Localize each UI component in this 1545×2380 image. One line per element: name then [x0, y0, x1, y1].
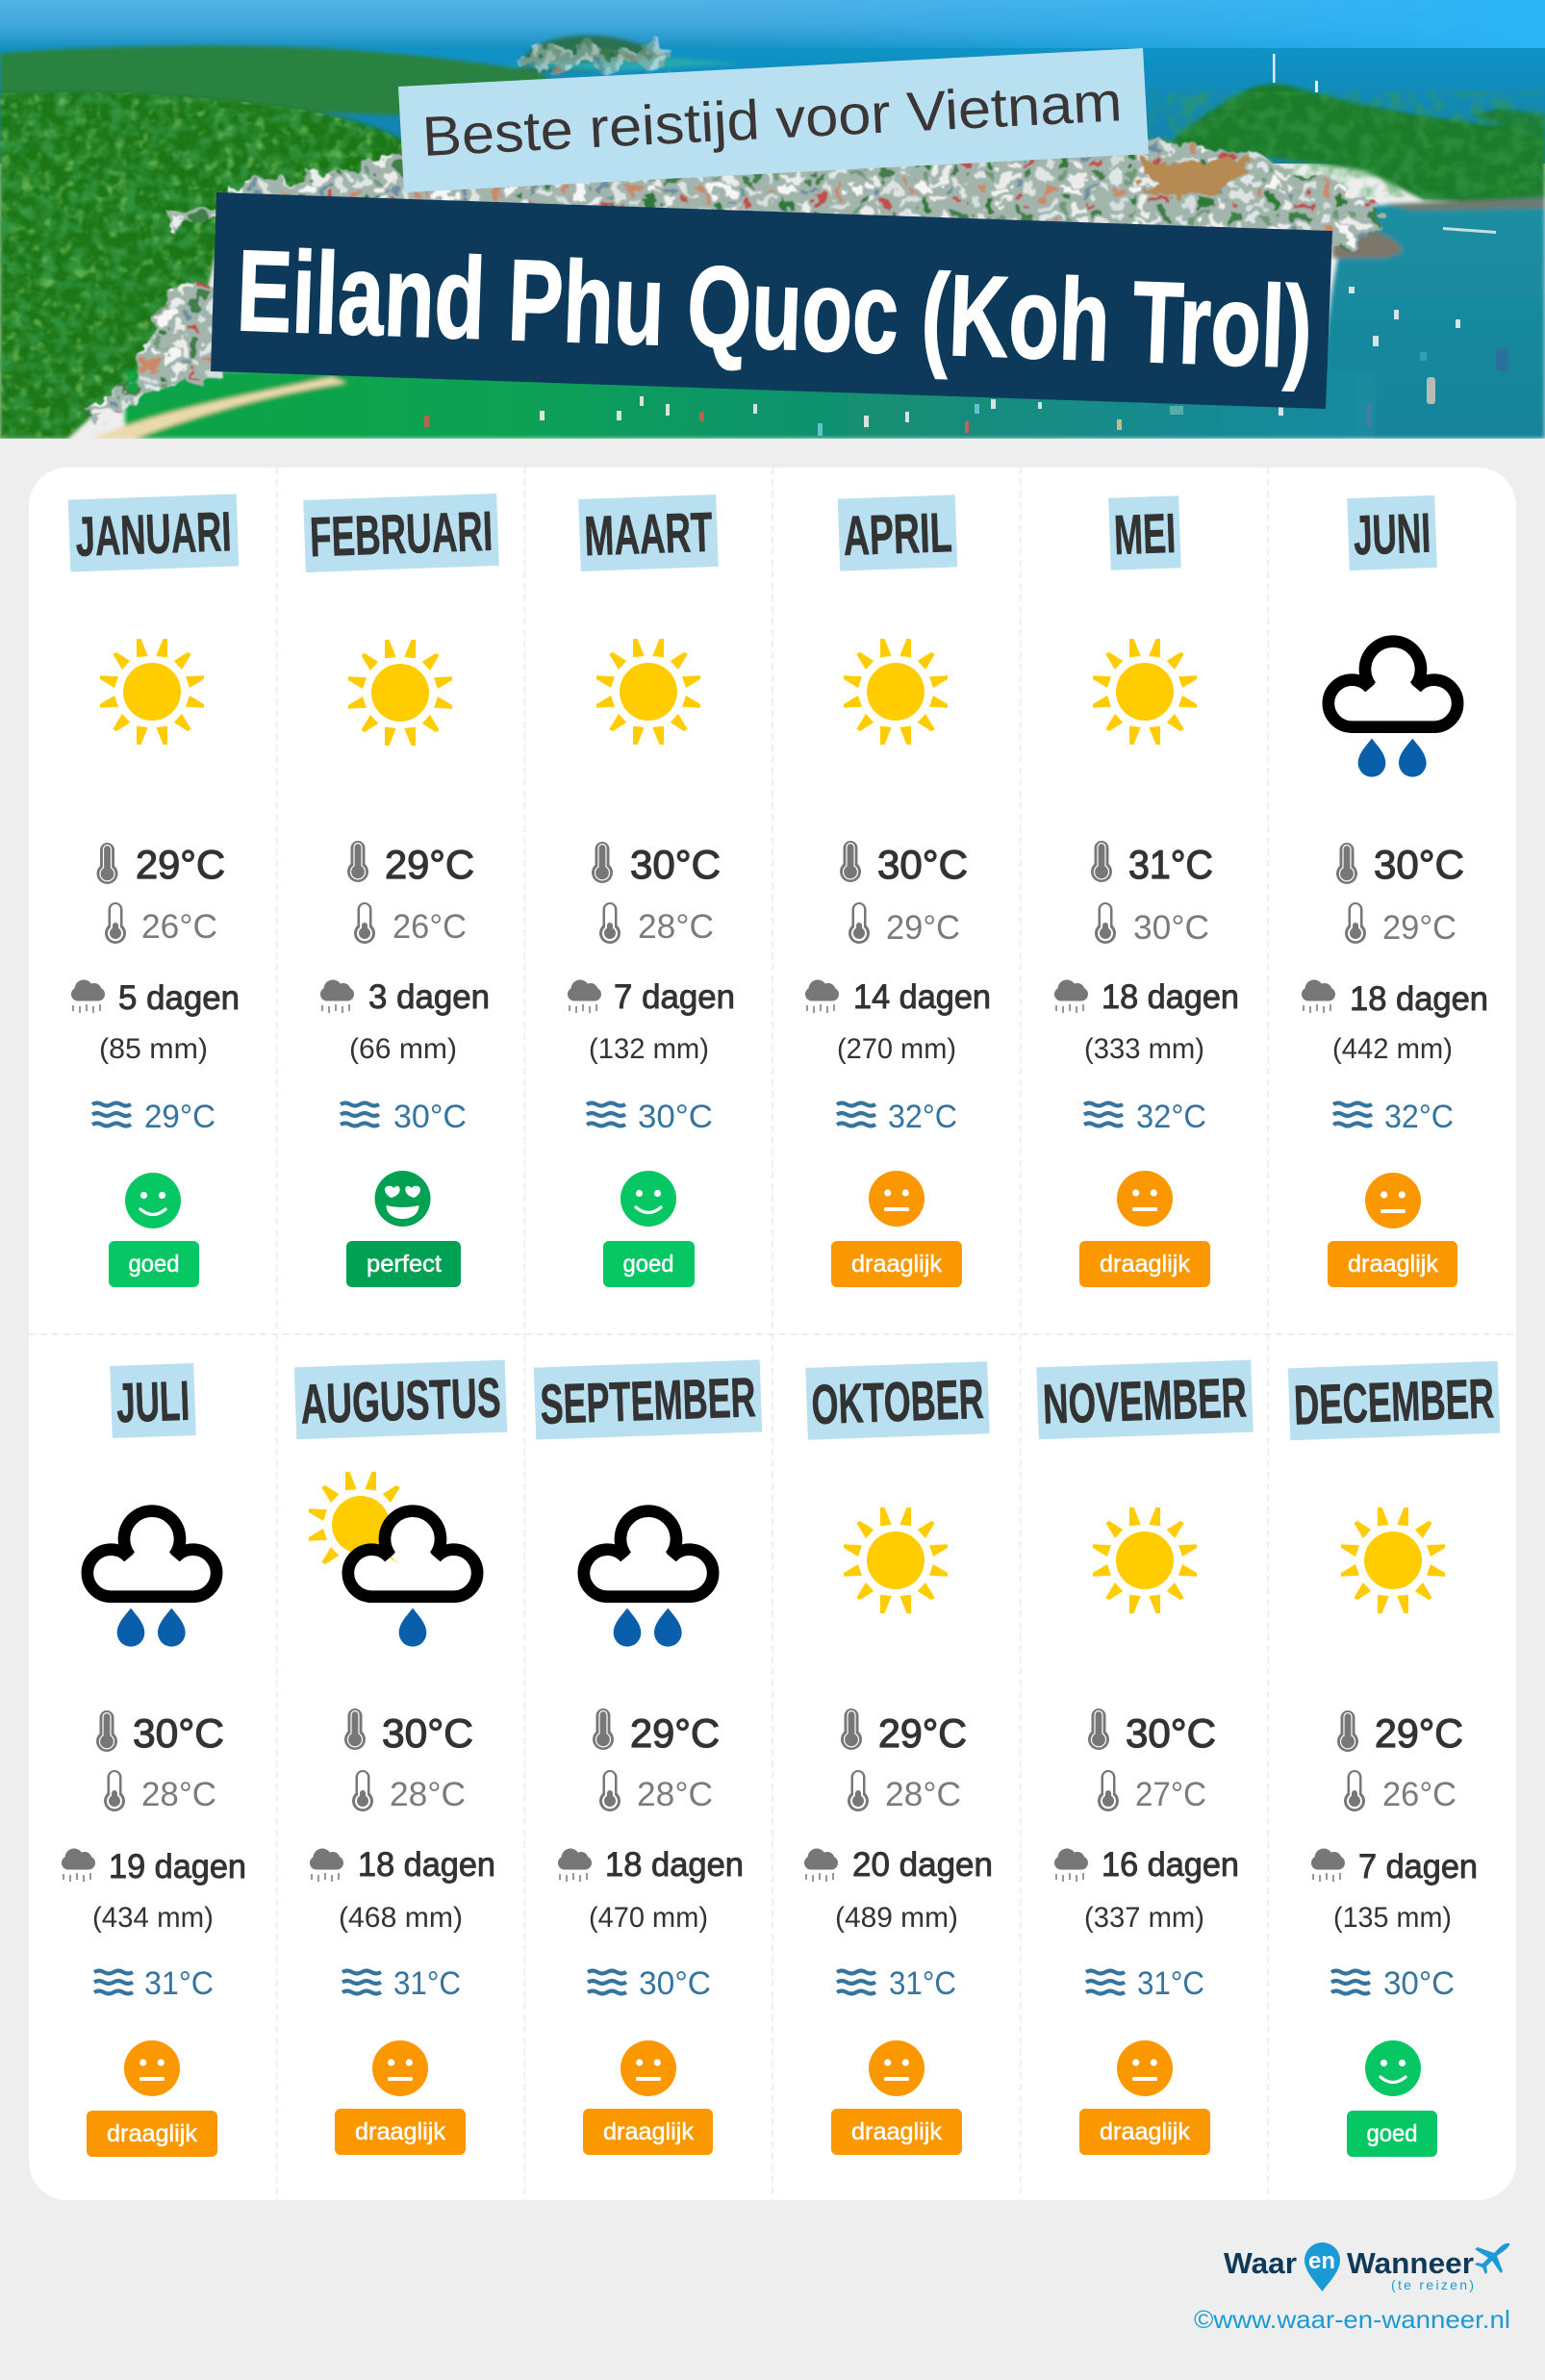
min temperature: 26°C [393, 908, 467, 946]
sea temperature: 31°C [144, 1965, 214, 2002]
logo: Waar en Wanneer [1224, 2242, 1509, 2292]
rain days: 7 dagen [1358, 1848, 1478, 1886]
min temperature [1098, 1770, 1206, 1813]
badge draaglijk [1079, 1241, 1210, 1287]
badge draaglijk: draaglijk [355, 2118, 445, 2145]
rainfall: (442 mm) [1332, 1033, 1453, 1065]
logo: Waar en Wanneer: en [1308, 2248, 1335, 2274]
title banner [211, 192, 1332, 409]
month label juli [110, 1363, 196, 1438]
badge goed: goed [623, 1251, 673, 1278]
badge goed [109, 1241, 199, 1287]
logo: Waar en Wanneer: Waar [1224, 2246, 1297, 2280]
rainfall: (468 mm) [339, 1902, 463, 1934]
month label november: NOVEMBER [1042, 1366, 1248, 1436]
panel: april [805, 494, 991, 1287]
smiley neutral [869, 2040, 924, 2096]
panel: juni [1302, 495, 1488, 1287]
badge draaglijk [583, 2109, 713, 2155]
badge perfect [346, 1241, 461, 1287]
panel: maart [568, 494, 735, 1287]
max temperature [347, 841, 474, 887]
badge goed: goed [129, 1251, 179, 1278]
grid dividers [29, 468, 1516, 2200]
max temperature [96, 842, 225, 887]
min temperature [599, 902, 714, 946]
rain days: 3 dagen [368, 978, 490, 1016]
month label april: APRIL [842, 501, 953, 568]
panel: oktober [804, 1361, 993, 2155]
icon: sun [844, 639, 948, 745]
rainfall: (132 mm) [589, 1033, 709, 1065]
min temperature: 30°C [1133, 909, 1209, 947]
max temperature: 29°C [136, 842, 225, 887]
sea temperature: 30°C [638, 1099, 713, 1135]
sea temperature: 29°C [144, 1099, 215, 1135]
min temperature: 26°C [1382, 1776, 1456, 1813]
icon: airplane [1475, 2243, 1509, 2274]
icon: sun [100, 639, 204, 745]
max temperature [841, 1709, 967, 1756]
rain days: 18 dagen [605, 1846, 744, 1884]
max temperature [1091, 841, 1213, 887]
badge draaglijk [831, 2109, 962, 2155]
min temperature [1345, 902, 1456, 947]
badge draaglijk: draaglijk [1348, 1251, 1438, 1278]
sea temperature: 30°C [639, 1965, 711, 2002]
sea temperature [94, 1965, 214, 2002]
panel: januari [68, 494, 240, 1287]
month label september: SEPTEMBER [539, 1366, 757, 1436]
rainfall: (489 mm) [835, 1902, 958, 1934]
max temperature: 30°C [630, 842, 721, 887]
rainfall: (66 mm) [349, 1033, 457, 1065]
smiley neutral [869, 1171, 924, 1227]
smiley neutral [372, 2040, 428, 2096]
badge draaglijk [335, 2109, 466, 2155]
panel: december [1288, 1361, 1500, 2157]
min temperature [104, 1770, 216, 1813]
forest texture [0, 92, 402, 439]
month label mei: MEI [1113, 502, 1177, 567]
smiley neutral [1365, 1173, 1421, 1228]
badge draaglijk: draaglijk [1100, 2118, 1190, 2145]
month label januari [68, 494, 239, 572]
min temperature [1095, 902, 1209, 947]
month label september [534, 1359, 762, 1440]
min temperature: 28°C [637, 1776, 713, 1813]
month label november [1036, 1360, 1254, 1439]
icon: sun [348, 640, 452, 746]
sea temperature [341, 1099, 467, 1135]
icon: sun [1093, 639, 1197, 745]
icon: cloud with two drops [1329, 642, 1457, 777]
logo: Waar en Wanneer: (te reizen) [1391, 2277, 1474, 2292]
max temperature: 31°C [1128, 842, 1213, 887]
panel: mei [1054, 495, 1239, 1287]
month label oktober [805, 1361, 990, 1440]
rain days: 18 dagen [1350, 980, 1488, 1018]
icon: sun [1093, 1507, 1197, 1613]
month label augustus: AUGUSTUS [299, 1366, 502, 1436]
rain days: 20 dagen [852, 1846, 993, 1884]
badge perfect: perfect [367, 1251, 442, 1278]
min temperature [848, 902, 960, 947]
min temperature [848, 1770, 961, 1813]
badge draaglijk: draaglijk [851, 2118, 942, 2145]
rain days: 16 dagen [1102, 1846, 1239, 1884]
max temperature [593, 1709, 720, 1756]
month label augustus [294, 1360, 507, 1439]
sea temperature [92, 1099, 215, 1135]
max temperature: 29°C [878, 1710, 967, 1756]
rain days: 19 dagen [109, 1848, 246, 1886]
sea temperature [837, 1965, 956, 2002]
max temperature: 30°C [133, 1710, 224, 1756]
max temperature: 30°C [877, 842, 968, 887]
month label oktober: OKTOBER [810, 1368, 985, 1436]
rain days: 18 dagen [358, 1846, 495, 1884]
max temperature [344, 1709, 473, 1756]
panel: white calendar card [29, 468, 1516, 2200]
rain days: 14 dagen [853, 978, 991, 1016]
subtitle text: Beste reistijd voor Vietnam [420, 70, 1124, 168]
badge draaglijk [1079, 2109, 1210, 2155]
max temperature [1337, 1710, 1463, 1756]
subtitle banner [398, 48, 1149, 192]
panel: juli [62, 1363, 246, 2157]
smiley neutral [621, 2040, 676, 2096]
sea temperature: 32°C [1384, 1099, 1454, 1135]
rain days: 7 dagen [614, 978, 735, 1016]
smiley neutral [124, 2040, 180, 2096]
month label april [838, 494, 957, 571]
icon: sun [1341, 1507, 1445, 1613]
month label juni [1347, 495, 1437, 570]
sea temperature: 31°C [1137, 1965, 1204, 2002]
max temperature: 29°C [630, 1710, 720, 1756]
sea temperature: 32°C [1136, 1099, 1206, 1135]
sea temperature: 30°C [393, 1099, 467, 1135]
sea temperature: 31°C [393, 1965, 461, 2002]
rain days: 5 dagen [118, 979, 240, 1017]
max temperature: 30°C [1126, 1710, 1216, 1756]
radio tower and boats [424, 54, 1508, 436]
badge draaglijk: draaglijk [851, 1251, 942, 1278]
sea temperature [1331, 1965, 1455, 2002]
min temperature: 29°C [1382, 909, 1456, 947]
max temperature: 30°C [382, 1710, 473, 1756]
badge draaglijk [1328, 1241, 1457, 1287]
smiley good [621, 1171, 676, 1227]
rainfall: (434 mm) [92, 1902, 214, 1934]
sea temperature [1084, 1099, 1206, 1135]
rain days: 18 dagen [1102, 978, 1239, 1016]
sea temperature [587, 1099, 713, 1135]
icon: cloud with two drops [584, 1511, 713, 1647]
month label februari [303, 494, 499, 572]
month label maart [578, 494, 719, 571]
badge draaglijk: draaglijk [603, 2118, 694, 2145]
panel: november [1036, 1360, 1254, 2155]
badge draaglijk: draaglijk [107, 2120, 197, 2147]
month label mei [1108, 495, 1181, 570]
rainfall: (270 mm) [837, 1033, 956, 1065]
icon: sun [596, 639, 700, 745]
sea temperature [342, 1965, 461, 2002]
month label juni: JUNI [1353, 502, 1431, 567]
badge goed [1347, 2111, 1437, 2157]
smiley perfect [375, 1171, 431, 1227]
month label juli: JULI [115, 1370, 190, 1434]
max temperature [1088, 1709, 1216, 1756]
smiley neutral [1117, 1171, 1173, 1227]
icon: sun behind cloud with drop [309, 1472, 477, 1647]
sea temperature [1333, 1099, 1454, 1135]
rainfall: (333 mm) [1084, 1033, 1204, 1065]
icon: cloud with two drops [88, 1511, 216, 1647]
sea temperature [837, 1099, 957, 1135]
badge goed: goed [1366, 2120, 1418, 2147]
rainfall: (470 mm) [589, 1902, 708, 1934]
month label februari: FEBRUARI [309, 500, 494, 569]
month label januari: JANUARI [74, 500, 233, 569]
min temperature [599, 1770, 713, 1813]
min temperature: 28°C [638, 908, 714, 946]
sea temperature: 30°C [1383, 1965, 1455, 2002]
badge draaglijk [831, 1241, 962, 1287]
min temperature: 26°C [141, 908, 217, 946]
rainfall: (337 mm) [1084, 1902, 1204, 1934]
panel: september [534, 1359, 762, 2155]
min temperature [105, 902, 217, 946]
icon: sun [844, 1507, 948, 1613]
sea temperature: 32°C [888, 1099, 957, 1135]
website credit: ©www.waar-en-wanneer.nl [1194, 2305, 1510, 2334]
sea temperature: 31°C [889, 1965, 956, 2002]
rainfall: (135 mm) [1333, 1902, 1452, 1934]
max temperature: 29°C [385, 842, 474, 887]
smiley good [1365, 2040, 1421, 2096]
min temperature: 29°C [886, 909, 960, 947]
badge goed [603, 1241, 695, 1287]
smiley neutral [1117, 2040, 1173, 2096]
min temperature: 28°C [141, 1776, 216, 1813]
min temperature: 28°C [885, 1776, 961, 1813]
min temperature [1344, 1770, 1456, 1813]
max temperature [840, 841, 968, 887]
smiley good [125, 1173, 181, 1228]
rainfall: (85 mm) [99, 1033, 208, 1065]
min temperature: 28°C [390, 1776, 466, 1813]
min temperature: 27°C [1135, 1776, 1206, 1813]
month label maart: MAART [583, 501, 714, 568]
min temperature [352, 1770, 466, 1813]
icon: map pin [1304, 2242, 1340, 2291]
badge draaglijk [87, 2111, 217, 2157]
badge draaglijk: draaglijk [1100, 1251, 1190, 1278]
header photo: aerial view of Phu Quoc [0, 0, 1545, 439]
min temperature [354, 902, 467, 946]
max temperature: 29°C [1375, 1710, 1463, 1756]
sea temperature [588, 1965, 711, 2002]
max temperature: 30°C [1374, 842, 1464, 887]
sea temperature [1086, 1965, 1204, 2002]
panel: februari [303, 494, 499, 1287]
logo: Waar en Wanneer: Wanneer [1347, 2246, 1474, 2280]
panel: augustus [294, 1360, 507, 2155]
village buildings [87, 46, 1385, 428]
